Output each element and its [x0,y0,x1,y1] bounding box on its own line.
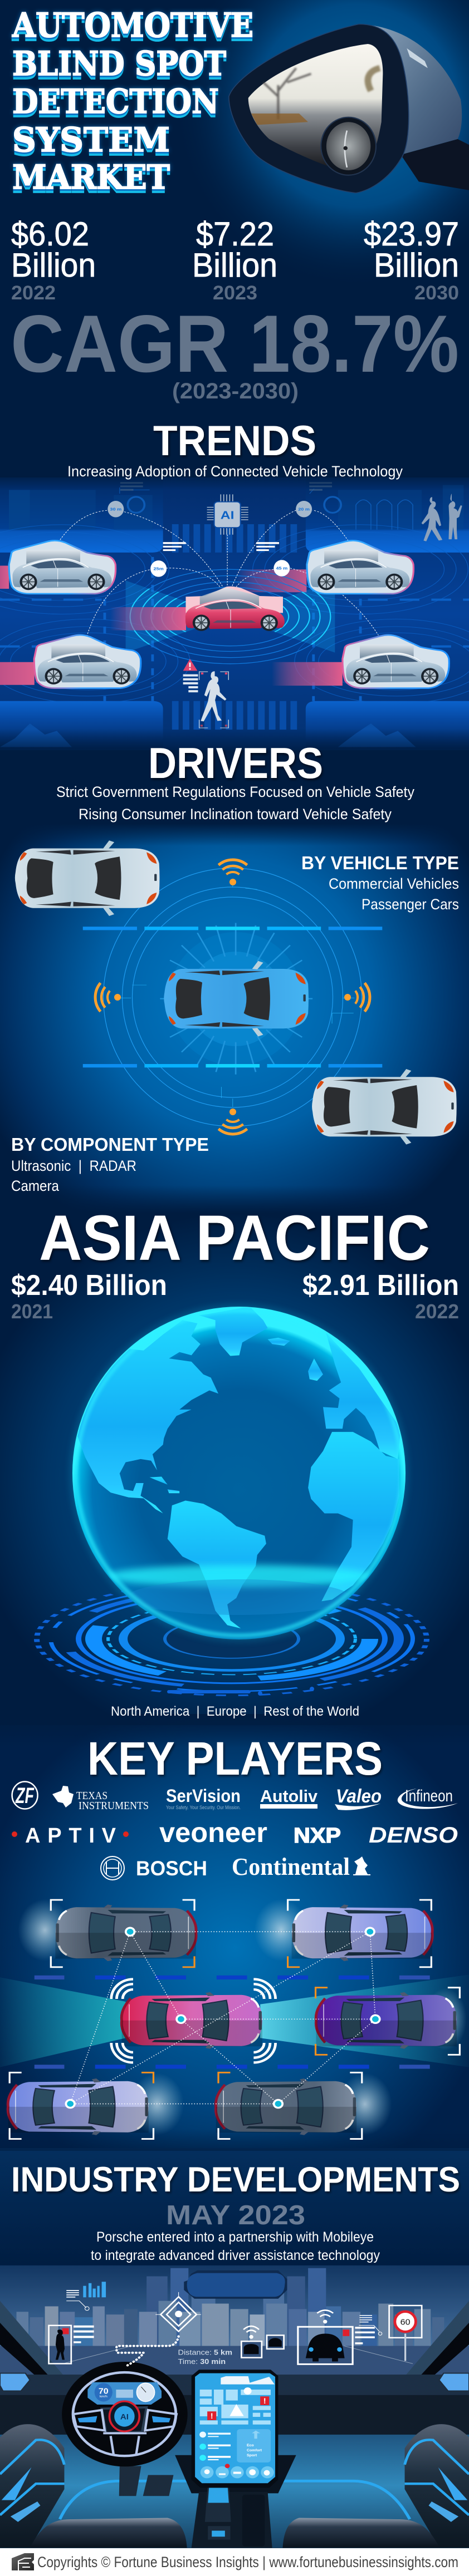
text: asia pacific 2022 value: 2022 [415,1300,459,1323]
text: development description: Porsche entered into a partnership with Mobileye [96,2229,374,2245]
icon: wifi sensor bottom [218,1109,247,1134]
panel: centre infotainment screen: ! [263,2397,266,2406]
callout: road hud overlays: Time: 30 min [178,2357,226,2366]
logo: Bosch: BOSCH [136,1857,207,1880]
title: DETECTION [12,82,219,121]
market size figures: Billion [374,247,459,284]
chart: radar sensing diagram [83,868,382,1126]
icon: steering wheel: AI [120,2413,129,2421]
market size figures: Billion [192,247,277,284]
car: top view blue car centre [164,961,309,1036]
icon: globe [70,1304,408,1642]
market size figures: $23.97 [364,215,459,253]
car: top left connected car [9,540,116,594]
title: AUTOMOTIVE [12,6,253,45]
panel: centre infotainment screen: Eco [247,2444,254,2447]
callout: road hud overlays [49,2282,422,2366]
panel: trends illustration [0,477,469,750]
logo: Denso: DENSO [369,1823,458,1848]
text: trends description: Increasing Adoption of Connected Vehicle Technology [67,463,403,480]
icon: wifi sensor right [344,983,370,1012]
logo: Autoliv: Autoliv [260,1786,318,1806]
icon: wifi sensor top [218,860,247,885]
logo: ZF [12,1782,38,1809]
logo: Infineon: Infineon [405,1787,453,1805]
panel: cockpit illustration [0,2265,469,2548]
text: asia pacific 2021 value [11,1269,167,1323]
icon: steering wheel: km/h [100,2395,108,2398]
logo: SerVision: SerVision [166,1786,241,1806]
chart: vehicle network [0,1899,469,2139]
logo: Bosch [101,1856,207,1880]
car: gray top left [55,1904,196,1961]
logos: key players [12,1782,458,1880]
callout: pedestrian detection [183,659,228,728]
heading: asia pacific: ASIA PACIFIC [39,1203,430,1274]
icon: side mirror [229,24,469,193]
text: development description: to integrate advanced driver assistance technology [91,2248,380,2263]
callout: road hud overlays: 60 [400,2318,411,2327]
text: drivers list: Rising Consumer Inclination toward Vehicle Safety [79,806,392,822]
car: top view white car top left [15,840,159,916]
car: top view white car bottom right [312,1069,457,1145]
text: by component type: Ultrasonic | RADAR [11,1158,136,1174]
heading: trends: TRENDS [153,417,316,465]
market size figures: 2030 [414,282,459,304]
title: BLIND SPOT [12,45,226,83]
callout: road hud overlays: Distance: 5 km [178,2348,232,2357]
text: asia pacific 2022 value [302,1269,459,1323]
logo: ZF: ZF [15,1784,35,1808]
icon: pedestrians top right [422,494,462,541]
heading: drivers: DRIVERS [148,738,323,787]
logo: Texas Instruments [52,1786,149,1812]
icon: holographic platform [37,1583,427,1696]
text: by component type: Camera [11,1178,60,1194]
icon: AI chip: AI [221,509,234,521]
text: by vehicle type: BY VEHICLE TYPE [301,853,459,873]
footer [0,2548,469,2576]
text: asia pacific 2022 value: $2.91 Billion [302,1269,459,1302]
logo: Infineon [398,1787,458,1809]
logo: SerVision: Your Safety. Your Security. Our Mission. [166,1805,241,1810]
text: asia pacific 2021 value: $2.40 Billion [11,1269,167,1302]
car: pink centre [121,1992,262,2049]
icon: steering wheel [62,2362,188,2466]
panel: centre infotainment screen: Comfort [247,2449,262,2452]
logo: Valeo: Valeo [336,1786,382,1807]
car: purple right [316,1992,457,2049]
text: other regions: North America | Europe | Rest of the World [111,1704,359,1719]
panel: centre infotainment screen [192,2370,278,2488]
panel: trends illustration: 30 m [110,506,121,511]
car: lilac bottom left [8,2078,149,2135]
logo: NXP: NXP [294,1824,341,1848]
market size figures: $7.22 [196,215,274,253]
text: by vehicle type: Commercial Vehicles [329,875,459,892]
text: by vehicle type: Passenger Cars [361,896,459,913]
logo: Continental: Continental [232,1853,350,1880]
text: drivers list [56,784,414,822]
logo: Texas Instruments: TEXAS [76,1790,108,1802]
text: development date: MAY 2023 [166,2200,305,2230]
logo: Veoneer: veoneer [159,1817,267,1848]
title [12,6,253,197]
fade behind scene edges [0,476,469,757]
car: bottom right connected car [343,635,449,688]
logo: Texas Instruments: INSTRUMENTS [79,1800,149,1812]
car: lilac top right [292,1904,432,1961]
car: bottom left connected car [34,635,141,688]
market size figures: $6.02 [11,215,89,253]
car: gray bottom centre [216,2078,356,2135]
market size figures [11,215,459,304]
market size figures: 2022 [11,282,56,304]
panel: trends illustration: 20 m [298,506,310,511]
icon: steering wheel: 70 [99,2387,109,2396]
title: SYSTEM [12,121,170,160]
panel: trends illustration: 45 m [276,565,287,570]
title: MARKET [12,158,170,197]
heading: key players: KEY PLAYERS [87,1732,383,1785]
text: by component type: BY COMPONENT TYPE [11,1134,209,1155]
text: by vehicle type [301,853,459,913]
CAGR figure: (2023-2030) [172,379,299,403]
text: development description [91,2229,380,2263]
text: by component type [11,1134,209,1194]
market size figures: Billion [11,247,96,284]
panel: centre infotainment screen: ! [211,2412,213,2421]
car: top right connected car [307,540,413,594]
car: central red car [185,587,285,631]
market size figures: 2023 [213,282,257,304]
panel: trends illustration: 25m [153,566,164,571]
logo: Aptiv: APTIV [25,1824,116,1848]
panel: centre infotainment screen: Sport [247,2454,257,2457]
icon: AI chip [207,494,248,535]
text: drivers list: Strict Government Regulations Focused on Vehicle Safety [56,784,414,800]
text: asia pacific 2021 value: 2021 [11,1300,53,1323]
icon: wifi sensor left [95,983,121,1012]
